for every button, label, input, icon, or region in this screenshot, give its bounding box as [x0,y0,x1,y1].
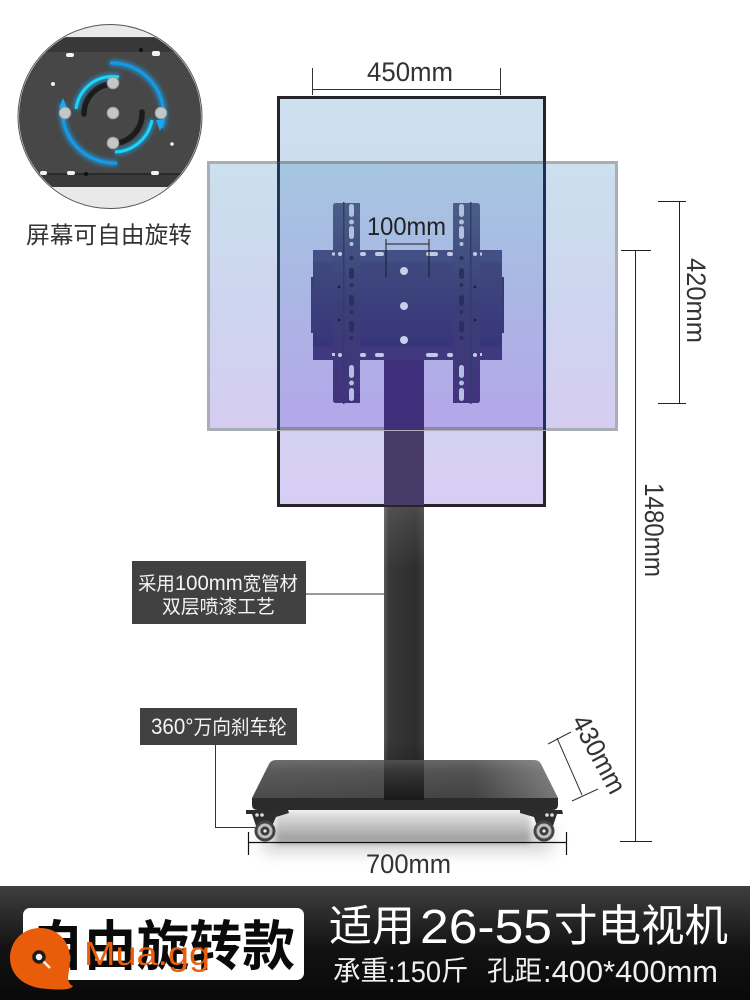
dimension: 1480mm total height [620,250,669,842]
icon: rotation detail circle [15,24,205,208]
pole seen through portrait screen [384,431,424,505]
banner spec: load capacity: :150 [388,956,441,989]
left rail [333,202,360,404]
pole behind screens [384,359,424,430]
banner spec: load capacity: 承重 [333,955,388,986]
stand pole [384,505,424,800]
badge: free rotation model: 自由旋转款 [31,917,295,977]
overlap of both screens [277,164,546,428]
banner spec: hole spacing: 孔距 [487,955,542,986]
icon: mounting screws [59,77,167,149]
dimension: 100mm hole spacing: 100mm [367,213,446,241]
icon: right caster wheel [520,810,563,842]
callout: tube material: 采用100mm宽管材 [138,572,298,595]
landscape screen outline [208,161,616,430]
banner heading: screen size range: 适用 [329,903,415,951]
dimension: 450mm screen width [312,57,501,95]
dimension: 100mm hole spacing [367,213,446,277]
callout: tube material: 双层喷漆工艺 [162,596,275,618]
banner heading: screen size range: 26-55 [420,901,552,954]
banner spec: hole spacing: :400*400mm [543,954,718,989]
callout: caster wheels [140,708,297,828]
dimension: 1480mm total height: 1480mm [639,483,669,577]
icon: left caster wheel [246,810,289,842]
banner heading: screen size range [329,901,728,954]
dimension: 430mm base depth: 430mm [566,710,632,799]
dimension: 450mm screen width: 450mm [367,57,453,87]
dimension: 700mm base width [248,832,567,879]
dimension: 420mm screen height: 420mm [681,258,711,343]
banner spec: load capacity [333,955,468,989]
floor shadow [262,810,552,852]
bottom banner [0,886,750,1000]
icon: blue rotation arrows [59,63,164,163]
dimension: 700mm base width: 700mm [366,849,451,879]
icon: black rotation slots [84,84,142,143]
banner heading: screen size range: 寸电视机 [554,903,728,951]
callout: tube material [132,561,384,624]
stand base plate [252,740,558,810]
portrait screen outline [278,98,544,506]
caption: screen rotates freely: 屏幕可自由旋转 [26,222,192,248]
dimension: 420mm screen height [658,201,711,404]
right rail [453,202,480,404]
watermark logo [10,928,210,990]
watermark logo: Mua.gg [84,935,210,972]
VESA wall mount bracket [311,202,504,404]
callout: caster wheels: 360°万向刹车轮 [151,714,287,739]
banner spec: load capacity: 斤 [441,955,468,986]
